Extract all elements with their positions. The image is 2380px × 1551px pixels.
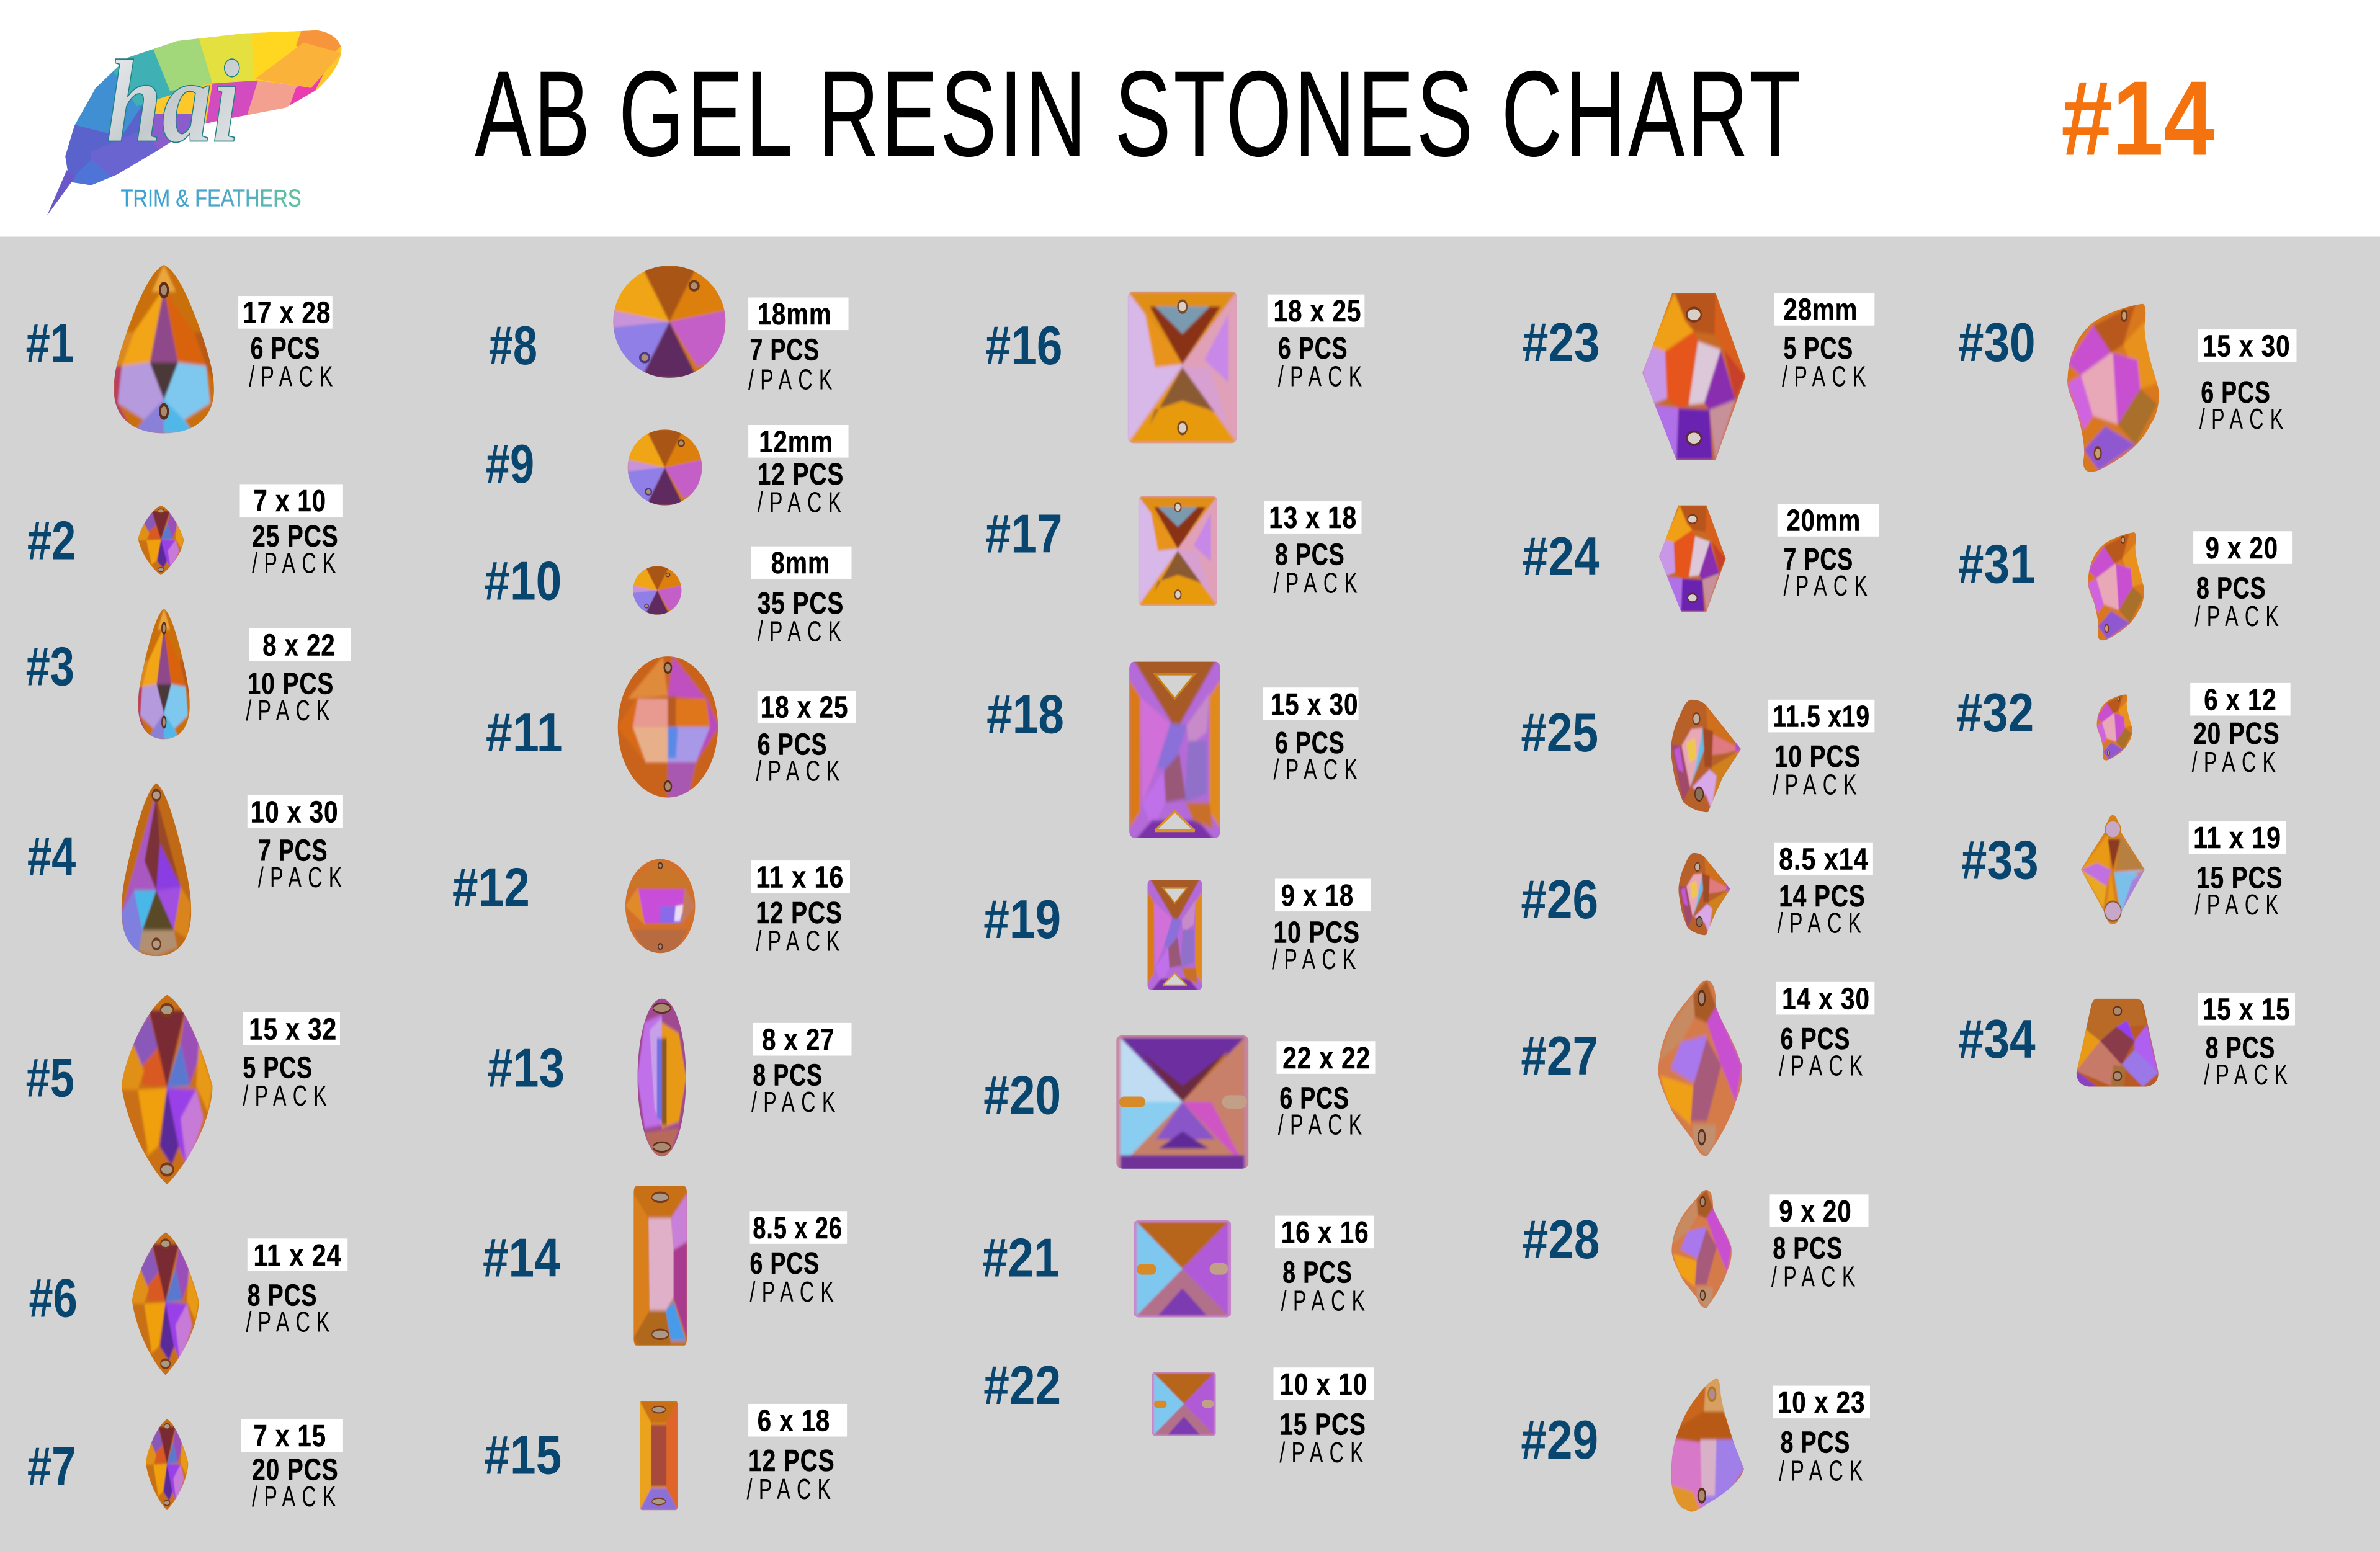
pieces: 7 PCS [258, 834, 328, 868]
pieces: 14 PCS [1779, 880, 1866, 913]
number: #18 [986, 684, 1064, 745]
per pack: /PACK [758, 616, 848, 648]
size label: 11 x 19 [2193, 821, 2281, 855]
per pack: /PACK [2192, 746, 2282, 778]
icon: stone [1117, 276, 1248, 458]
icon: stone [1120, 644, 1230, 856]
per pack: /PACK [748, 364, 839, 396]
size label: 10 x 10 [1279, 1368, 1367, 1401]
number: #12 [452, 857, 530, 918]
size label: 6 x 12 [2204, 683, 2277, 717]
size label: 8 x 22 [262, 628, 336, 662]
icon: stone [1649, 963, 1751, 1174]
size label: 11.5 x19 [1773, 700, 1870, 733]
size label: 18 x 25 [761, 691, 849, 725]
stone #16 entry [985, 276, 1368, 458]
icon: stone [133, 596, 195, 752]
icon: stone [141, 1410, 192, 1519]
per pack: /PACK [756, 926, 846, 957]
icon: stone [2075, 804, 2151, 935]
icon: stone [133, 498, 188, 582]
pieces: 6 PCS [1781, 1022, 1850, 1056]
icon: stone [1130, 485, 1225, 617]
pieces: 8 PCS [2206, 1032, 2275, 1065]
per pack: /PACK [1274, 568, 1364, 599]
icon: stone [1664, 689, 1748, 823]
stone #9 entry [486, 422, 849, 519]
size label: 11 x 24 [254, 1239, 341, 1272]
pieces: 6 PCS [1278, 332, 1348, 365]
stone #20 entry [983, 1022, 1375, 1182]
size label: 10 x 30 [251, 795, 339, 829]
stone #14 entry [483, 1170, 847, 1361]
logo script: hai [106, 37, 240, 168]
size label: 7 x 10 [254, 485, 326, 518]
icon: stone [629, 1170, 692, 1361]
number: #29 [1521, 1409, 1598, 1470]
stone #17 entry [985, 485, 1364, 617]
number: #6 [29, 1267, 78, 1328]
title: AB GEL RESIN STONES CHART [475, 47, 1803, 182]
number: #33 [1961, 829, 2039, 890]
size label: 15 x 30 [2203, 329, 2291, 363]
per pack: /PACK [258, 862, 348, 893]
pieces: 8 PCS [2196, 571, 2266, 605]
icon: stone [1632, 276, 1756, 476]
pieces: 6 PCS [2201, 376, 2271, 409]
size label: 18mm [758, 298, 832, 331]
stone #3 entry [26, 596, 351, 752]
icon: stone [1146, 1366, 1222, 1442]
icon: stone [1142, 869, 1207, 1001]
per pack: /PACK [1274, 754, 1364, 786]
number: #8 [489, 315, 537, 376]
stone #27 entry [1521, 963, 1874, 1174]
size label: 15 x 15 [2203, 993, 2291, 1027]
number: #1 [26, 312, 74, 373]
stone #34 entry [1958, 990, 2295, 1096]
stone #26 entry [1521, 843, 1873, 943]
per pack: /PACK [1278, 1109, 1368, 1141]
stone #23 entry [1523, 276, 1874, 476]
number: #24 [1523, 525, 1600, 587]
size label: 6 x 18 [758, 1404, 830, 1437]
stone #2 entry [27, 484, 343, 582]
per pack: /PACK [1771, 1261, 1862, 1293]
icon: stone [1124, 1210, 1241, 1327]
stone #25 entry [1521, 689, 1874, 823]
stone #21 entry [982, 1210, 1374, 1327]
stone #24 entry [1523, 495, 1879, 622]
size label: 14 x 30 [1782, 982, 1870, 1016]
number: #31 [1958, 533, 2036, 594]
stone #30 entry [1958, 285, 2296, 489]
per pack: /PACK [1281, 1285, 1371, 1317]
pieces: 12 PCS [756, 896, 843, 930]
per pack: /PACK [1279, 1437, 1370, 1469]
per pack: /PACK [2204, 1059, 2294, 1091]
size label: 18 x 25 [1274, 295, 1361, 328]
size label: 16 x 16 [1281, 1216, 1369, 1249]
pieces: 8 PCS [1781, 1426, 1850, 1460]
per pack: /PACK [751, 1086, 842, 1118]
pieces: 12 PCS [758, 458, 844, 491]
size label: 12mm [759, 426, 833, 459]
icon: stone [628, 561, 686, 620]
pieces: 8 PCS [753, 1059, 823, 1093]
chart number: #14 [2061, 60, 2214, 178]
pieces: 6 PCS [758, 728, 827, 761]
pieces: 6 PCS [1275, 726, 1345, 760]
pieces: 35 PCS [758, 587, 844, 620]
pieces: 10 PCS [248, 668, 334, 701]
icon: stone [620, 422, 709, 513]
stone #7 entry [27, 1410, 343, 1519]
size label: 11 x 16 [756, 861, 844, 895]
per pack: /PACK [750, 1276, 840, 1308]
per pack: /PACK [2195, 601, 2285, 633]
number: #34 [1958, 1008, 2036, 1070]
pieces: 15 PCS [2196, 862, 2283, 895]
pieces: 10 PCS [1274, 916, 1360, 950]
pieces: 7 PCS [750, 333, 820, 367]
pieces: 15 PCS [1279, 1408, 1366, 1441]
per pack: /PACK [246, 695, 336, 726]
pieces: 20 PCS [2193, 717, 2280, 751]
pieces: 5 PCS [243, 1051, 313, 1084]
icon: stone [125, 1218, 205, 1389]
size label: 13 x 18 [1269, 501, 1357, 535]
per pack: /PACK [1778, 908, 1868, 939]
icon: feather quill [47, 170, 76, 215]
icon: stone [2082, 521, 2150, 651]
header band [0, 0, 2380, 237]
stone #32 entry [1956, 682, 2291, 778]
size label: 8.5 x 26 [753, 1212, 843, 1245]
size label: 7 x 15 [254, 1419, 326, 1453]
stone #15 entry [484, 1390, 847, 1521]
per pack: /PACK [1272, 944, 1362, 975]
size label: 8mm [771, 547, 830, 580]
icon: stone [104, 248, 224, 450]
size label: 9 x 20 [2206, 532, 2278, 565]
stone #12 entry [452, 850, 850, 963]
number: #15 [484, 1424, 561, 1485]
per pack: /PACK [758, 487, 848, 519]
pieces: 8 PCS [1773, 1232, 1843, 1266]
icon: stone [2069, 990, 2167, 1096]
logo tagline: TRIM & FEATHERS [120, 185, 302, 212]
per pack: /PACK [747, 1473, 837, 1505]
number: #3 [26, 636, 74, 697]
number: #28 [1523, 1209, 1600, 1270]
pieces: 8 PCS [1282, 1256, 1353, 1290]
icon: stone [636, 1390, 681, 1521]
stone #28 entry [1523, 1178, 1869, 1320]
number: #21 [982, 1227, 1060, 1288]
pieces: 8 PCS [1275, 539, 1345, 572]
icon: stone [1103, 1022, 1261, 1182]
pieces: 6 PCS [1279, 1081, 1349, 1115]
icon: stone [1664, 1365, 1751, 1525]
stone #4 entry [27, 766, 348, 973]
icon: stone [608, 642, 728, 811]
number: #7 [27, 1436, 76, 1497]
size label: 17 x 28 [243, 297, 331, 330]
number: #16 [985, 315, 1062, 376]
per pack: /PACK [2199, 404, 2289, 436]
per pack: /PACK [252, 1482, 342, 1513]
stone #22 entry [983, 1354, 1374, 1469]
size label: 10 x 23 [1778, 1386, 1866, 1419]
number: #22 [983, 1354, 1061, 1416]
per pack: /PACK [246, 1307, 336, 1338]
icon: stone [2056, 285, 2169, 489]
pieces: 20 PCS [252, 1454, 339, 1487]
icon: stone [619, 850, 702, 963]
pieces: 6 PCS [251, 332, 320, 365]
size label: 28mm [1784, 293, 1858, 327]
icon: stone [1673, 845, 1735, 943]
stone #18 entry [986, 644, 1364, 856]
icon: low-poly feather [47, 30, 341, 215]
pieces: 7 PCS [1784, 543, 1853, 576]
number: #20 [983, 1065, 1061, 1126]
number: #19 [983, 888, 1061, 950]
size label: 15 x 30 [1271, 688, 1359, 722]
icon: stone [602, 254, 736, 389]
icon: stone [1665, 1178, 1738, 1320]
number: #25 [1521, 702, 1598, 763]
number: #17 [985, 503, 1062, 564]
stone #19 entry [983, 869, 1371, 1001]
icon: stone [2093, 687, 2136, 767]
pieces: 5 PCS [1784, 332, 1853, 365]
per pack: /PACK [1784, 571, 1874, 602]
number: #2 [27, 510, 76, 571]
stone #29 entry [1521, 1365, 1870, 1525]
stone #8 entry [489, 254, 849, 396]
number: #4 [27, 825, 76, 887]
number: #5 [26, 1047, 74, 1109]
number: #9 [486, 433, 534, 494]
pieces: 6 PCS [750, 1247, 820, 1281]
size label: 8 x 27 [762, 1023, 835, 1057]
number: #26 [1521, 869, 1598, 930]
pieces: 25 PCS [252, 520, 339, 553]
icon: stone [114, 766, 199, 973]
icon: stone [1652, 495, 1732, 622]
stone #13 entry [487, 983, 851, 1173]
number: #30 [1958, 311, 2036, 373]
stone #11 entry [486, 642, 856, 811]
pieces: 10 PCS [1774, 740, 1861, 774]
number: #11 [486, 702, 563, 763]
size label: 22 x 22 [1282, 1042, 1371, 1075]
per pack: /PACK [1278, 361, 1368, 393]
icon: stone [633, 983, 691, 1173]
number: #10 [484, 550, 561, 611]
stone #1 entry [26, 248, 339, 450]
per pack: /PACK [2195, 889, 2285, 921]
per pack: /PACK [249, 361, 339, 393]
size label: 15 x 32 [249, 1012, 337, 1046]
per pack: /PACK [1779, 1455, 1869, 1487]
per pack: /PACK [252, 548, 342, 579]
number: #32 [1956, 682, 2034, 743]
stone #5 entry [26, 976, 340, 1204]
pieces: 8 PCS [248, 1279, 317, 1312]
icon: stone [112, 976, 221, 1204]
per pack: /PACK [1782, 361, 1872, 393]
size label: 9 x 18 [1281, 879, 1354, 913]
number: #27 [1521, 1025, 1598, 1086]
per pack: /PACK [1779, 1050, 1869, 1082]
per pack: /PACK [1773, 769, 1863, 801]
number: #14 [483, 1227, 560, 1288]
per pack: /PACK [756, 756, 846, 787]
size label: 20mm [1786, 504, 1861, 538]
per pack: /PACK [243, 1081, 333, 1112]
size label: 9 x 20 [1779, 1195, 1852, 1228]
stone #31 entry [1958, 521, 2292, 651]
number: #13 [487, 1037, 565, 1099]
stone #10 entry [484, 547, 851, 648]
logo [47, 30, 341, 216]
number: #23 [1523, 311, 1600, 373]
stone #6 entry [29, 1218, 347, 1389]
pieces: 12 PCS [748, 1444, 835, 1478]
size label: 8.5 x14 [1779, 843, 1869, 876]
stone #33 entry [1961, 804, 2286, 935]
